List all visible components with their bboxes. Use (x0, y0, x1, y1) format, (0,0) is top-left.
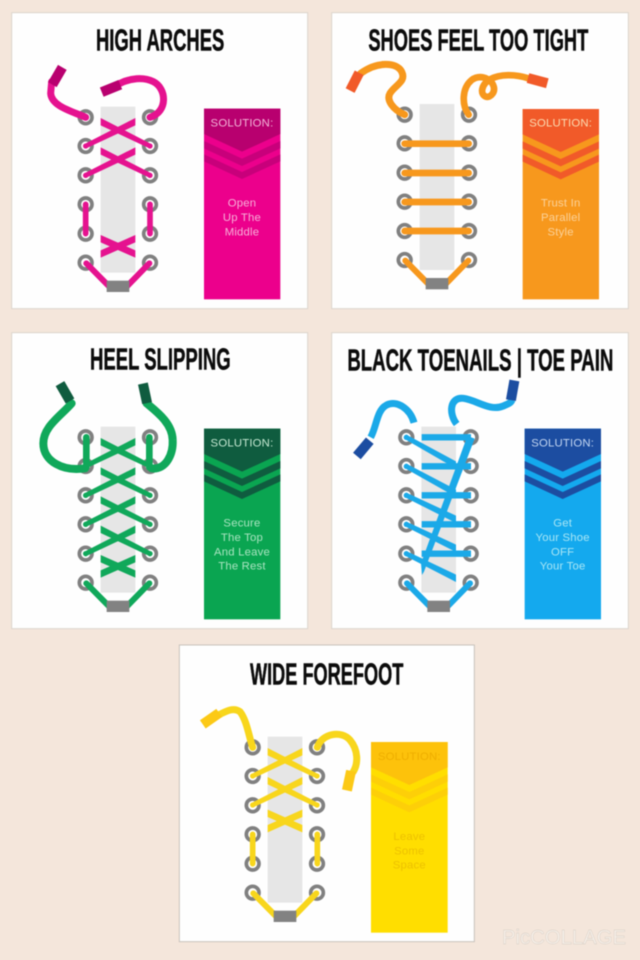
solution banner: trust in parallel style: Style (548, 226, 574, 238)
solution banner: open up the middle: Middle (225, 226, 259, 238)
solution banner: open up the middle (204, 109, 280, 299)
watermark: PicCollage: PicCOLLAGE (502, 927, 626, 949)
panel: shoes feel too tight (332, 13, 628, 309)
solution banner: leave some space: SOLUTION: (378, 751, 441, 763)
solution banner: get your shoe off your toe: Get (553, 518, 573, 530)
panel card (12, 13, 308, 309)
solution banner: get your shoe off your toe (525, 429, 601, 619)
solution banner: leave some space: Some (394, 845, 425, 857)
solution banner: open up the middle: Open (228, 198, 256, 210)
solution banner: open up the middle: SOLUTION: (211, 118, 273, 130)
solution banner: secure the top and leave the rest: And Leave (214, 546, 270, 558)
solution banner: secure the top and leave the rest: The Top (221, 532, 263, 544)
lacing diagram: leave some space (200, 709, 357, 922)
solution banner: get your shoe off your toe: Your Shoe (536, 532, 590, 544)
solution banner: get your shoe off your toe: Your Toe (540, 561, 586, 573)
solution banner: trust in parallel style: Parallel (541, 212, 580, 224)
panel: wide forefoot (179, 645, 474, 942)
panel card (332, 13, 628, 309)
solution banner: get your shoe off your toe: OFF (551, 546, 574, 558)
solution banner: leave some space (371, 742, 448, 933)
panel card (332, 333, 628, 629)
solution banner: trust in parallel style: Trust In (541, 198, 580, 210)
heading: high arches: HIGH ARCHES (96, 23, 224, 58)
solution banner: trust in parallel style (523, 109, 599, 299)
panel card (179, 645, 474, 942)
solution banner: leave some space: Space (393, 860, 426, 872)
solution banner: leave some space: Leave (393, 831, 425, 843)
panel: heel slipping (12, 333, 308, 629)
lacing diagram: parallel (346, 64, 549, 289)
solution banner: get your shoe off your toe: SOLUTION: (531, 438, 594, 450)
solution banner: secure the top and leave the rest: Secure (223, 518, 261, 530)
panel card (12, 333, 308, 629)
solution banner: secure the top and leave the rest: The Rest (218, 561, 266, 573)
solution banner: secure the top and leave the rest: SOLUTION: (211, 438, 273, 450)
panel: high arches (12, 13, 308, 309)
heading: wide forefoot: WIDE FOREFOOT (250, 656, 403, 691)
solution banner: trust in parallel style: SOLUTION: (529, 118, 592, 130)
lacing diagram: high arches (48, 65, 164, 292)
heading: heel slipping: HEEL SLIPPING (90, 341, 231, 376)
solution banner: secure the top and leave the rest (204, 429, 280, 619)
solution banner: open up the middle: Up The (223, 212, 261, 224)
lacing diagram: secure the top (43, 381, 173, 612)
panel: black toenails and toe pain (332, 333, 628, 629)
lacing diagram: get your shoe off your toe (353, 380, 519, 612)
